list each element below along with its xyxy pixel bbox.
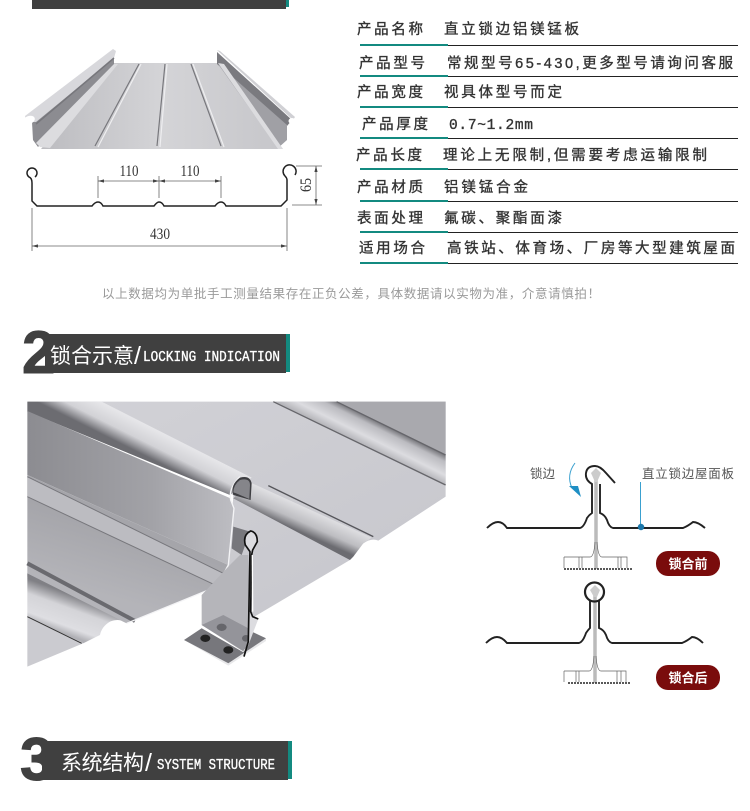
base plate (184, 638, 266, 666)
row: product width: 视具体型号而定 (444, 84, 562, 101)
cut edge (127, 477, 240, 623)
far rib (273, 402, 446, 485)
upper roll (27, 402, 252, 495)
row: product model: 产品型号 (359, 55, 425, 72)
row: application (359, 239, 738, 264)
clip edge with hook (244, 531, 258, 657)
row: product thickness: 0.7~1.2mm (449, 118, 533, 134)
row: product width: 产品宽度 (357, 84, 423, 101)
row: product width (357, 84, 738, 108)
dimension lines (32, 166, 322, 251)
row: surface treatment: 表面处理 (357, 210, 424, 227)
section 3 heading: / (145, 749, 152, 777)
lower flat (27, 475, 228, 623)
panel profile dimension drawing: 430 (150, 226, 170, 243)
row: surface treatment: 氟碳、聚酯面漆 (444, 210, 562, 227)
row: product thickness (360, 116, 738, 138)
row: surface treatment (357, 210, 738, 232)
numeral 2: 2 (22, 319, 55, 386)
row: application: 高铁站、体育场、厂房等大型建筑屋面 (447, 239, 735, 257)
section 2 heading (22, 319, 290, 386)
locking diagram: before (487, 463, 734, 576)
row: product material: 铝镁锰合金 (444, 179, 528, 196)
row: product thickness: 产品厚度 (362, 116, 428, 133)
panel profile dimension drawing: 65 (298, 178, 315, 192)
label: lock edge: 锁边 (530, 466, 555, 481)
locking photo (27, 402, 446, 667)
row: product model: 常规型号65-430,更多型号请询问客服 (447, 55, 734, 72)
product image: roof panel (22, 49, 295, 149)
clip body (202, 555, 250, 652)
badge: 锁合前 (668, 556, 708, 572)
label: standing seam roof panel: 直立锁边屋面板 (642, 466, 734, 481)
top right corner shading (337, 402, 446, 455)
badge: 锁合后 (668, 670, 708, 686)
roll opening (232, 477, 252, 500)
row: product name: 产品名称 (357, 21, 423, 38)
panel seam (486, 600, 703, 643)
row: product name (357, 20, 738, 46)
clip (594, 470, 598, 569)
row: product length (356, 147, 738, 170)
section 2 heading: 锁合示意 (50, 345, 134, 368)
panel seam (487, 466, 705, 528)
pointer (638, 482, 644, 530)
numeral 3: 3 (20, 726, 53, 793)
section 1 header bar remnant (32, 0, 289, 9)
disclaimer note: 以上数据均为单批手工测量结果存在正负公差，具体数据请以实物为准，介意请慎拍！ (102, 286, 600, 301)
seam roll continuation (233, 482, 372, 560)
bottom left rib (27, 573, 127, 643)
section 2 heading: / (134, 342, 141, 370)
side wall (27, 411, 234, 565)
locking diagram: after (486, 582, 720, 690)
panel profile dimension drawing: 110 (180, 163, 200, 180)
curved arrow (569, 463, 581, 497)
row: product model (359, 55, 738, 76)
profile outline (27, 165, 296, 206)
row: application: 适用场合 (359, 240, 426, 257)
badge (656, 551, 720, 576)
row: product length: 理论上无限制,但需要考虑运输限制 (443, 147, 707, 164)
row: product length: 产品长度 (356, 147, 422, 164)
row: product name: 直立锁边铝镁锰板 (444, 20, 580, 38)
panel profile dimension drawing (27, 163, 322, 251)
row: product material (357, 179, 738, 202)
dimension values: 110 (120, 163, 138, 180)
section 3 heading: SYSTEM STRUCTURE (157, 757, 275, 774)
section 3 heading: 系统结构 (61, 752, 144, 775)
badge (656, 665, 720, 690)
section 3 heading (20, 726, 292, 793)
section 2 heading: LOCKING INDICATION (143, 349, 280, 366)
spec table (356, 20, 738, 264)
row: product material: 产品材质 (357, 179, 423, 196)
clip (593, 592, 597, 683)
